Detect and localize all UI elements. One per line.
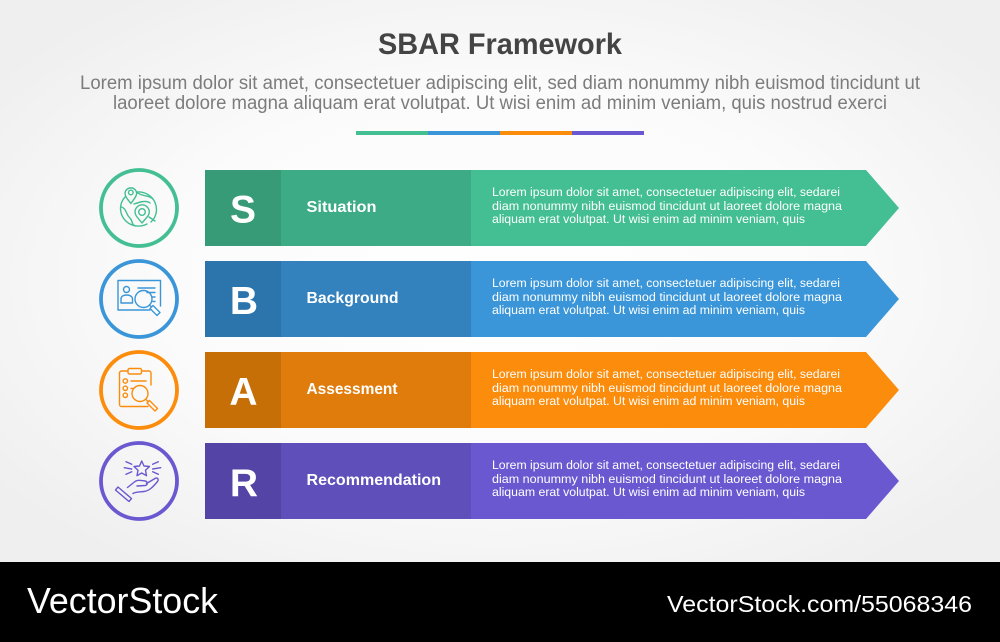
- arrow: situation: [205, 170, 899, 246]
- label: Assessment: Assessment: [306, 381, 398, 398]
- letter A: A: [229, 371, 258, 414]
- panel: situation: [101, 170, 899, 246]
- icon: profile card with magnifier: [101, 261, 177, 337]
- letter B: B: [230, 280, 258, 323]
- letter R: R: [230, 462, 258, 505]
- arrow: background: [205, 261, 899, 337]
- arrow: assessment: [205, 352, 899, 428]
- body text: aliquam erat volutpat. Ut wisi enim ad minim veniam, quis: [492, 212, 805, 226]
- subtitle text: laoreet dolore magna aliquam erat volutpat. Ut wisi enim ad minim veniam, quis nostrud exerci: [113, 93, 887, 114]
- body text: [492, 185, 842, 226]
- watermark footer bar: [0, 562, 1000, 642]
- body text: Lorem ipsum dolor sit amet, consectetuer adipiscing elit, sedarei: [492, 367, 840, 381]
- body text: [492, 367, 842, 408]
- body text: diam nonummy nibh euismod tincidunt ut laoreet dolore magna: [492, 290, 842, 304]
- footer image id: VectorStock.com/55068346: [667, 591, 972, 617]
- letter S: S: [230, 188, 256, 232]
- body text: Lorem ipsum dolor sit amet, consectetuer adipiscing elit, sedarei: [492, 185, 840, 199]
- label: Recommendation: Recommendation: [306, 472, 441, 489]
- arrow: recommendation: [205, 443, 899, 519]
- icon: globe with map pins: [101, 170, 177, 246]
- body text: Lorem ipsum dolor sit amet, consectetuer adipiscing elit, sedarei: [492, 276, 840, 290]
- body text: aliquam erat volutpat. Ut wisi enim ad minim veniam, quis: [492, 303, 805, 317]
- panel: assessment: [101, 352, 899, 428]
- subtitle text: [80, 73, 921, 114]
- label: Background: Background: [306, 290, 398, 307]
- panel: recommendation: [101, 443, 899, 519]
- body text: aliquam erat volutpat. Ut wisi enim ad minim veniam, quis: [492, 485, 805, 499]
- body text: diam nonummy nibh euismod tincidunt ut laoreet dolore magna: [492, 472, 842, 486]
- title: SBAR Framework: [378, 28, 622, 61]
- footer logo text: VectorStock: [27, 580, 219, 621]
- body text: diam nonummy nibh euismod tincidunt ut laoreet dolore magna: [492, 199, 842, 213]
- body text: aliquam erat volutpat. Ut wisi enim ad minim veniam, quis: [492, 394, 805, 408]
- panel: background: [101, 261, 899, 337]
- body text: Lorem ipsum dolor sit amet, consectetuer adipiscing elit, sedarei: [492, 458, 840, 472]
- icon: clipboard with magnifier: [101, 352, 177, 428]
- colour divider: [356, 131, 644, 135]
- label: Situation: Situation: [306, 199, 376, 216]
- body text: diam nonummy nibh euismod tincidunt ut laoreet dolore magna: [492, 381, 842, 395]
- body text: [492, 458, 842, 499]
- subtitle text: Lorem ipsum dolor sit amet, consectetuer adipiscing elit, sed diam nonummy nibh euismod tincidunt ut: [80, 73, 921, 94]
- icon: hand holding star: [101, 443, 177, 519]
- body text: [492, 276, 842, 317]
